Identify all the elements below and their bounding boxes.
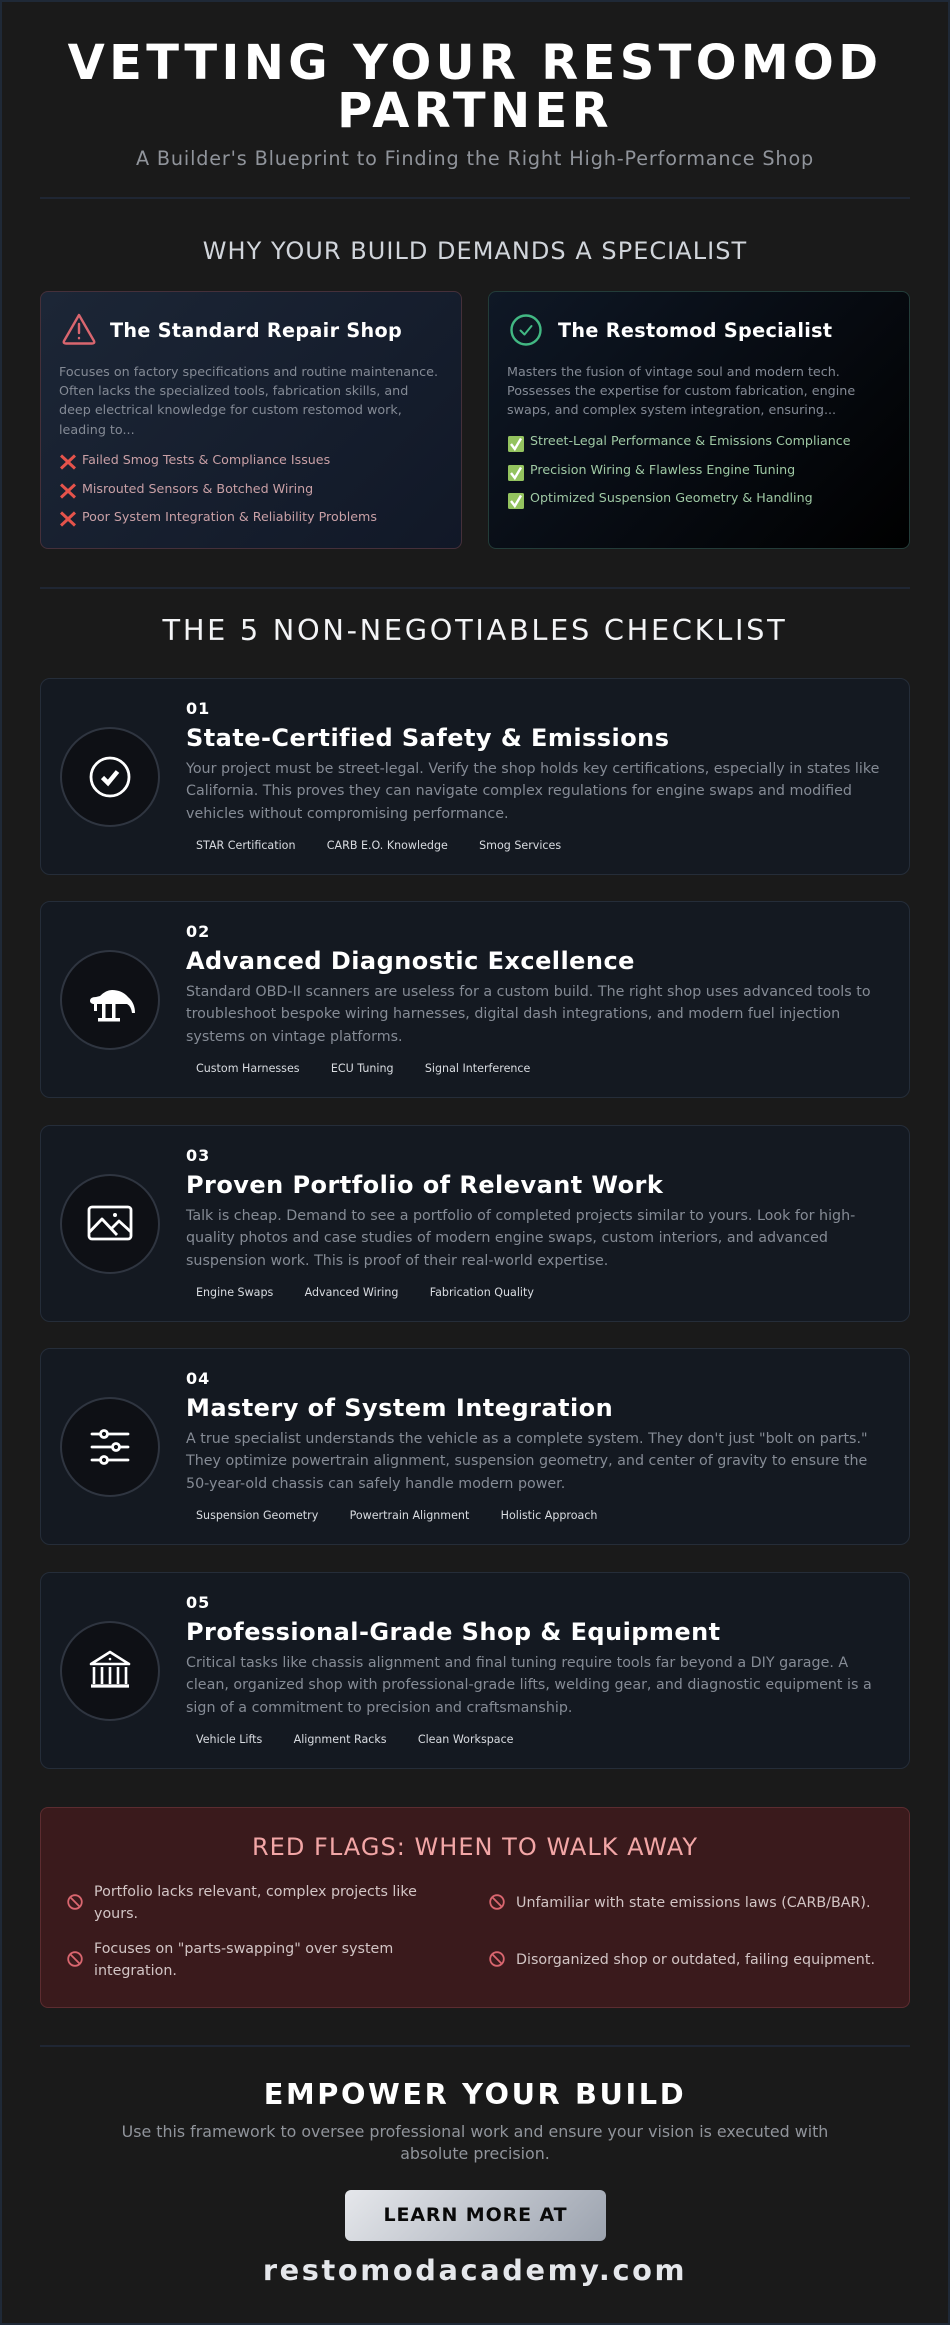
item: Poor System Integration & Reliability Problems (82, 509, 377, 524)
item description: suspension work. This is proof of their real-world expertise. (186, 1253, 608, 1269)
icon: green check circle (510, 314, 542, 346)
red flag text: yours. (94, 1906, 138, 1922)
text: standard shop description: deep electrical knowledge for custom restomod work, (59, 402, 402, 417)
item description: troubleshoot bespoke wiring harnesses, digital dash integrations, and modern fuel injection (186, 1006, 840, 1022)
subtitle: A Builder's Blueprint to Finding the Right High-Performance Shop (136, 147, 814, 170)
list: specialist benefits (508, 433, 851, 509)
red flag text: Disorganized shop or outdated, failing equipment. (516, 1952, 875, 1968)
number: 04 (186, 1369, 210, 1388)
icon: green check (508, 465, 524, 481)
title (68, 35, 882, 139)
website url: restomodacademy.com (263, 2253, 687, 2287)
icon: ban (67, 1894, 83, 1910)
icon: picture (60, 1174, 160, 1274)
red flag text: Portfolio lacks relevant, complex projects like (94, 1884, 417, 1900)
icon: green check (508, 436, 524, 452)
item description (186, 1655, 872, 1716)
tags: Powertrain Alignment (350, 1508, 469, 1522)
tags (196, 1508, 597, 1522)
tags: Vehicle Lifts (196, 1732, 262, 1746)
tags: Clean Workspace (418, 1732, 514, 1746)
item description: Talk is cheap. Demand to see a portfolio of completed projects similar to yours. Look for high- (186, 1208, 855, 1224)
item title: Advanced Diagnostic Excellence (186, 947, 635, 975)
item: Misrouted Sensors & Botched Wiring (82, 480, 313, 496)
tags: Signal Interference (425, 1062, 530, 1074)
icon: certified check (60, 727, 160, 827)
panel: checklist item 4 (40, 1348, 910, 1545)
item description: clean, organized shop with professional-grade lifts, welding gear, and diagnostic equipment is a (186, 1677, 872, 1693)
item: Optimized Suspension Geometry & Handling (530, 490, 813, 505)
number: 02 (186, 922, 210, 941)
item description: quality photos and case studies of modern engine swaps, custom interiors, and advanced (186, 1230, 828, 1246)
button: learn more: LEARN MORE AT (383, 2204, 568, 2226)
button: learn more (345, 2190, 606, 2241)
panel: checklist item 1 (40, 678, 910, 875)
section heading: checklist: THE 5 NON-NEGOTIABLES CHECKLIST (163, 613, 787, 647)
item description: They optimize powertrain alignment, suspension geometry, and center of gravity to ensure the (186, 1453, 867, 1469)
footer heading: EMPOWER YOUR BUILD (264, 2077, 686, 2111)
heading: red flags: RED FLAGS: WHEN TO WALK AWAY (252, 1833, 698, 1861)
red flag text (94, 1941, 393, 1979)
footer text: absolute precision. (400, 2144, 550, 2163)
icon: sliders (60, 1397, 160, 1497)
tags (196, 1286, 534, 1298)
item: Street-Legal Performance & Emissions Compliance (530, 433, 851, 448)
text: standard shop description: Focuses on factory specifications and routine maintenance. (59, 364, 438, 379)
icon: ban (67, 1951, 83, 1967)
item: Failed Smog Tests & Compliance Issues (82, 452, 330, 467)
item description: California. This proves they can navigate complex regulations for engine swaps and modified (186, 783, 852, 799)
text: specialist description: Possesses the expertise for custom fabrication, engine (507, 383, 855, 398)
text: standard shop description: leading to... (59, 422, 135, 437)
item title: State-Certified Safety & Emissions (186, 724, 669, 752)
tags (196, 838, 561, 852)
tags: Custom Harnesses (196, 1062, 300, 1074)
tags: Advanced Wiring (305, 1286, 398, 1298)
red flag text: Focuses on "parts-swapping" over system (94, 1941, 393, 1957)
item description: A true specialist understands the vehicle as a complete system. They don't just "bolt on parts." (186, 1431, 868, 1447)
icon: ban (489, 1894, 505, 1910)
list: standard shop problems (60, 452, 377, 527)
title: PARTNER (337, 83, 613, 139)
item title: Mastery of System Integration (186, 1394, 613, 1422)
icon: red cross (60, 511, 76, 527)
footer text: Use this framework to oversee professional work and ensure your vision is executed with (122, 2122, 828, 2141)
number: 01 (186, 699, 210, 718)
text: standard shop description: Often lacks the specialized tools, fabrication skills, and (59, 383, 408, 398)
tags (196, 1062, 530, 1074)
tags: STAR Certification (196, 838, 295, 852)
item description: Your project must be street-legal. Verify the shop holds key certifications, especially in states like (186, 761, 879, 777)
red flag text: integration. (94, 1963, 177, 1979)
red flag text (94, 1884, 417, 1922)
panel: red flags (40, 1807, 910, 2008)
item title: Proven Portfolio of Relevant Work (186, 1171, 663, 1199)
number: 05 (186, 1593, 210, 1612)
number: 03 (186, 1146, 210, 1165)
item description (186, 984, 871, 1045)
item: Precision Wiring & Flawless Engine Tuning (530, 462, 795, 476)
text: specialist description (507, 364, 855, 417)
panel: restomod specialist (488, 291, 910, 549)
text: specialist description: Masters the fusion of vintage soul and modern tech. (507, 364, 840, 379)
icon: green check (508, 493, 524, 509)
item description: Critical tasks like chassis alignment and final tuning require tools far beyond a DIY garage. A (186, 1655, 848, 1671)
item description: sign of a commitment to precision and craftsmanship. (186, 1700, 572, 1716)
panel: checklist item 3 (40, 1125, 910, 1322)
tags: Alignment Racks (294, 1732, 387, 1746)
tags: Suspension Geometry (196, 1508, 318, 1522)
red flag text: Unfamiliar with state emissions laws (CARB/BAR). (516, 1895, 871, 1911)
tags: ECU Tuning (331, 1062, 394, 1074)
footer text (122, 2122, 828, 2163)
panel: checklist item 2 (40, 901, 910, 1098)
text: specialist description: swaps, and complex system integration, ensuring... (507, 402, 836, 417)
icon: ban (489, 1951, 505, 1967)
item description: 50-year-old chassis can safely handle modern power. (186, 1476, 565, 1492)
text: standard shop description (59, 364, 438, 437)
panel: standard repair shop (40, 291, 462, 549)
item description: systems on vintage platforms. (186, 1029, 403, 1045)
tags: Smog Services (479, 838, 561, 852)
item title: Professional-Grade Shop & Equipment (186, 1618, 721, 1646)
heading: restomod specialist: The Restomod Specialist (558, 318, 832, 342)
tags (196, 1732, 514, 1746)
item description (186, 761, 879, 822)
item description (186, 1208, 855, 1269)
icon: red cross (60, 483, 76, 499)
icon: red cross (60, 454, 76, 470)
tags: Holistic Approach (501, 1508, 597, 1522)
section heading: why specialist: WHY YOUR BUILD DEMANDS A SPECIALIST (203, 237, 747, 265)
tags: Engine Swaps (196, 1286, 273, 1298)
item description (186, 1431, 868, 1492)
panel: checklist item 5 (40, 1572, 910, 1769)
item description: vehicles without compromising performance. (186, 806, 509, 822)
icon: car on lift (60, 950, 160, 1050)
heading: standard repair shop: The Standard Repair Shop (110, 318, 402, 342)
icon: workshop building (60, 1621, 160, 1721)
icon: warning triangle (62, 314, 96, 345)
title: VETTING YOUR RESTOMOD (68, 35, 882, 91)
item description: Standard OBD-II scanners are useless for a custom build. The right shop uses advanced tools to (186, 984, 871, 1000)
tags: Fabrication Quality (430, 1286, 534, 1298)
tags: CARB E.O. Knowledge (327, 838, 448, 852)
